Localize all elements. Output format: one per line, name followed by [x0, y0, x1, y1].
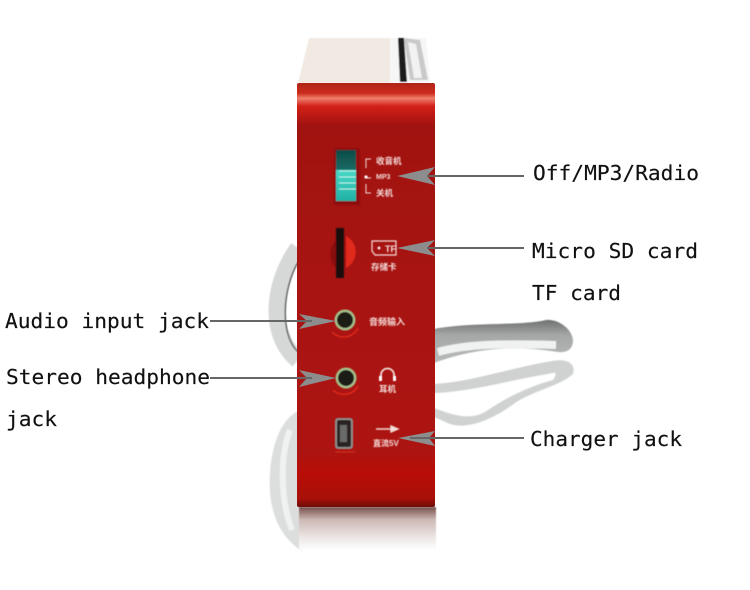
cable behind radio [270, 248, 574, 551]
cable loop light [434, 360, 574, 426]
label: Charger jack: Charger jack [530, 427, 682, 451]
callout arrow: Stereo headphone jack [210, 370, 336, 387]
USB charger port: 直流5V [373, 438, 399, 448]
headphone jack [333, 368, 397, 394]
mode labels: MP3 [376, 174, 390, 181]
mode labels: 收音机 [376, 156, 402, 166]
micro SD slot [330, 228, 356, 278]
label: Micro SD card: Micro SD card [532, 239, 698, 263]
mode labels: 关机 [376, 188, 394, 198]
upper cable left [277, 248, 298, 360]
callout arrow: Charger jack [398, 431, 524, 446]
audio input jack: 音频输入 [369, 316, 405, 327]
label: jack: jack [6, 407, 57, 431]
callout arrow: Off/MP3/Radio [397, 167, 524, 185]
label: Stereo headphone: Stereo headphone [6, 365, 210, 389]
USB charger port [335, 418, 399, 452]
label: TF card: TF card [532, 281, 621, 305]
label: Audio input jack: Audio input jack [5, 309, 209, 333]
audio input jack [332, 310, 405, 337]
lower cable highlight [283, 430, 292, 530]
TF card icon: 存储卡 [371, 262, 397, 272]
cable loop highlight [438, 344, 556, 352]
mode switch [334, 148, 360, 205]
mode labels [364, 156, 402, 198]
cable loop dark [434, 320, 573, 363]
radio side panel [297, 83, 435, 507]
callout arrow: Audio input jack [210, 314, 336, 329]
label: Off/MP3/Radio: Off/MP3/Radio [533, 161, 699, 185]
headphone jack: 耳机 [379, 384, 397, 394]
callout arrow: Micro SD card [397, 240, 524, 256]
lower cable left [270, 411, 302, 551]
upper cable inner edge [285, 262, 298, 352]
TF card icon: TF [385, 244, 396, 254]
TF card icon [371, 241, 397, 272]
radio top surface [298, 38, 430, 83]
reflection under radio [299, 507, 436, 550]
